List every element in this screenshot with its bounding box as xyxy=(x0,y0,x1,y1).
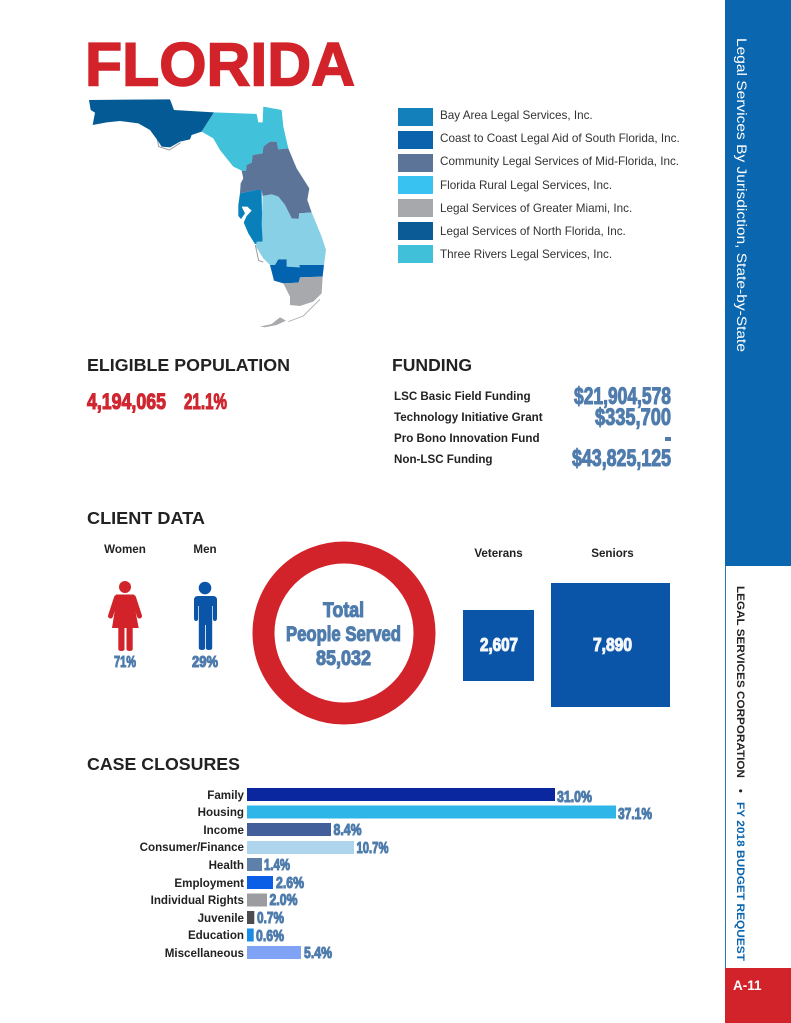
legend: Bay Area Legal Services, Inc. xyxy=(440,109,593,122)
sidebar: page number tab: A-11 xyxy=(733,978,762,993)
bar chart: case closures: Health xyxy=(209,859,244,872)
bar chart: case closures: Employment xyxy=(174,877,244,890)
sidebar: top blue panel: Legal Services By Jurisdiction, State-by-State xyxy=(733,38,749,352)
donut: total people served: Total xyxy=(323,599,364,622)
funding table: $335,700 xyxy=(595,404,671,431)
heading: case closures: CASE CLOSURES xyxy=(87,754,240,774)
map region: Greater Miami xyxy=(283,277,323,306)
funding table xyxy=(394,383,671,472)
legend: Three Rivers Legal Services, Inc. xyxy=(440,248,612,261)
map detail: upper keys xyxy=(288,299,320,322)
sidebar: vertical footer text: • xyxy=(734,789,746,793)
funding table: Technology Initiative Grant xyxy=(394,411,543,424)
bar chart: case closures: 0.7% xyxy=(257,910,284,927)
funding table: LSC Basic Field Funding xyxy=(394,390,531,403)
legend: Legal Services of Greater Miami, Inc. xyxy=(440,202,632,215)
map detail: coast outlines xyxy=(157,139,263,262)
bar chart: case closures: 0.6% xyxy=(256,928,284,945)
sidebar: page number tab xyxy=(725,968,791,1023)
bar chart: case closures: Individual Rights xyxy=(151,894,244,907)
seniors square: Seniors xyxy=(591,547,634,560)
sidebar: vertical footer text xyxy=(725,566,746,968)
donut: total people served: People Served xyxy=(286,623,401,646)
map of Florida xyxy=(89,99,326,327)
legend xyxy=(398,108,680,263)
bar chart: case closures xyxy=(140,788,652,962)
map region: Florida Rural xyxy=(256,194,326,267)
legend: Florida Rural Legal Services, Inc. xyxy=(440,179,612,192)
women icon and share xyxy=(104,543,146,671)
bar chart: case closures: Juvenile xyxy=(198,912,245,925)
heading: funding: FUNDING xyxy=(392,355,472,375)
map region: Bay Area xyxy=(238,190,263,244)
map detail: Tampa Bay xyxy=(240,207,252,223)
bar chart: case closures: 2.0% xyxy=(270,892,298,909)
bar chart: case closures: Housing xyxy=(198,806,244,819)
bar chart: case closures: 37.1% xyxy=(618,806,652,823)
legend: Coast to Coast Legal Aid of South Florida, Inc. xyxy=(440,132,680,145)
bar chart: case closures: 5.4% xyxy=(304,945,332,962)
funding table: $21,904,578 xyxy=(574,383,671,410)
funding table: Pro Bono Innovation Fund xyxy=(394,432,540,445)
seniors square: 7,890 xyxy=(593,635,632,655)
women icon and share: 71% xyxy=(114,654,136,671)
sidebar: top blue panel xyxy=(725,0,791,566)
bar chart: case closures: Education xyxy=(188,929,244,942)
sidebar: vertical footer text: LEGAL SERVICES CORPORATION xyxy=(734,586,746,778)
eligible population figures: 21.1% xyxy=(184,389,227,414)
heading: client data: CLIENT DATA xyxy=(87,508,205,528)
eligible population figures: 4,194,065 xyxy=(87,389,166,414)
bar chart: case closures: 31.0% xyxy=(557,789,592,806)
men icon and share xyxy=(192,543,218,671)
sidebar: vertical footer text: FY 2018 BUDGET REQUEST xyxy=(734,802,746,961)
bar chart: case closures: Miscellaneous xyxy=(165,947,244,960)
funding table: $43,825,125 xyxy=(572,445,671,472)
legend: Community Legal Services of Mid-Florida, Inc. xyxy=(440,155,679,168)
bar chart: case closures: Income xyxy=(203,824,245,837)
veterans square: 2,607 xyxy=(480,635,518,655)
title: FLORIDA xyxy=(85,30,355,98)
women icon and share: Women xyxy=(104,543,146,556)
seniors square xyxy=(551,547,670,707)
donut: total people served: 85,032 xyxy=(316,647,371,670)
men icon and share: 29% xyxy=(192,654,218,671)
bar chart: case closures: 2.6% xyxy=(276,875,304,892)
donut: total people served xyxy=(264,552,424,714)
bar chart: case closures: 1.4% xyxy=(264,857,290,874)
bar chart: case closures: 8.4% xyxy=(334,822,362,839)
veterans square xyxy=(463,547,534,681)
bar chart: case closures: Family xyxy=(207,789,245,802)
legend: Legal Services of North Florida, Inc. xyxy=(440,225,626,238)
funding table: Non-LSC Funding xyxy=(394,453,493,466)
bar chart: case closures: 10.7% xyxy=(356,840,388,857)
bar chart: case closures: Consumer/Finance xyxy=(140,841,245,854)
map region: Community Legal Services xyxy=(240,142,312,219)
heading: eligible population: ELIGIBLE POPULATION xyxy=(87,355,290,375)
map region: Three Rivers xyxy=(202,107,288,171)
men icon and share: Men xyxy=(193,543,217,556)
map region: North Florida xyxy=(89,99,214,147)
map detail: keys xyxy=(260,317,286,327)
map region: Coast to Coast xyxy=(270,259,324,283)
eligible population figures xyxy=(87,389,227,414)
veterans square: Veterans xyxy=(474,547,523,560)
